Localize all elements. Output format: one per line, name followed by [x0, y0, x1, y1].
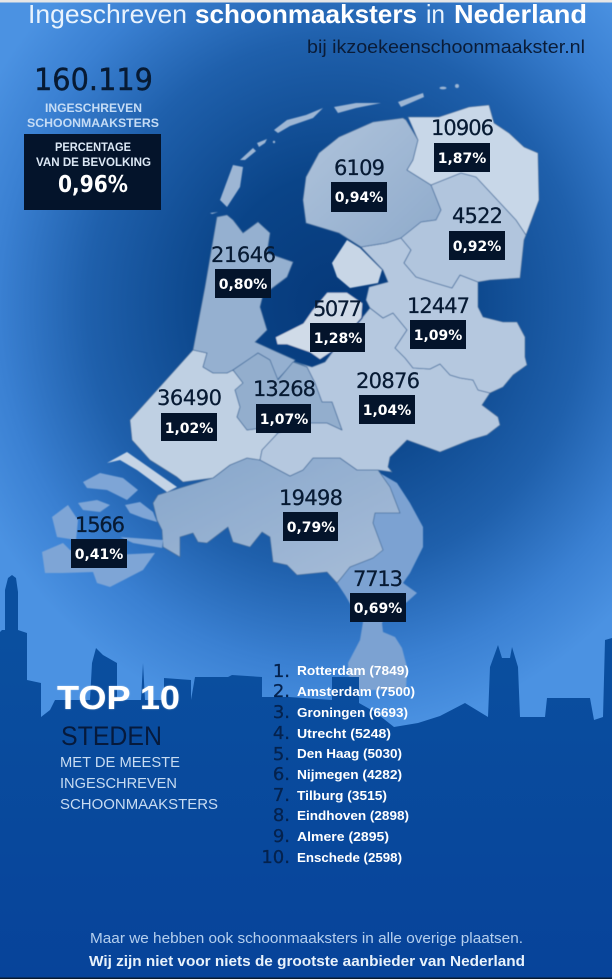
label: Gelderland: [356, 369, 420, 424]
label: Friesland: [331, 156, 387, 212]
total caption: INGESCHREVEN: [45, 103, 142, 115]
map: Zeeland islands: [42, 473, 163, 587]
top 10 city list: 5.: [273, 744, 290, 765]
top 10 city list: 7.: [273, 785, 290, 806]
map: Friesland: [303, 118, 441, 247]
label: Overijssel: [407, 294, 470, 349]
label: Utrecht: [253, 377, 316, 433]
label: Noord-Holland: [211, 243, 276, 298]
footer text: [89, 931, 525, 970]
top edge line: [0, 0, 612, 2]
footer text: Maar we hebben ook schoonmaaksters in alle overige plaatsen.: [90, 931, 523, 947]
subtitle: bij ikzoekeenschoonmaakster.nl: [307, 36, 585, 57]
label: Friesland: 0,94%: [335, 190, 383, 206]
top 10 title: TOP 10: [57, 679, 180, 716]
label: Groningen: 1,87%: [438, 151, 486, 167]
label: Noord-Holland: 0,80%: [219, 277, 267, 293]
percentage panel: VAN DE BEVOLKING: [36, 157, 151, 169]
label: Flevoland: 5077: [313, 297, 362, 321]
label: Limburg: 7713: [353, 567, 403, 591]
top 10 city list: Nijmegen (4282): [297, 767, 402, 782]
label: Zuid-Holland: 36490: [157, 386, 222, 410]
label: Noord-Brabant: [279, 486, 343, 541]
top 10 description: SCHOONMAAKSTERS: [60, 796, 218, 813]
label: Drenthe: [449, 204, 505, 260]
map: Limburg: [337, 472, 423, 690]
top 10 city list: 10.: [261, 847, 290, 868]
title: [28, 0, 587, 29]
total caption: [27, 103, 159, 130]
percentage panel: PERCENTAGE: [55, 142, 131, 154]
top 10 description: INGESCHREVEN: [60, 775, 177, 792]
map of the Netherlands: [42, 84, 539, 690]
label: Zuid-Holland: 1,02%: [165, 421, 213, 437]
label: Limburg: [350, 567, 406, 622]
label: Groningen: [431, 116, 494, 172]
map: Overijssel: [361, 238, 527, 393]
top 10 description: [60, 754, 218, 813]
map: Goeree strip: [107, 452, 177, 492]
map: Utrecht: [233, 353, 342, 433]
label: Noord-Brabant: 19498: [279, 486, 343, 510]
label: Groningen: 10906: [431, 116, 494, 140]
top 10 city list: Rotterdam (7849): [297, 663, 409, 678]
label: Drenthe: 4522: [452, 204, 503, 228]
label: Gelderland: 1,04%: [363, 403, 411, 419]
top 10 city list: 3.: [273, 702, 290, 723]
percentage panel: [24, 134, 161, 210]
bottom edge line: [0, 978, 612, 979]
top 10 city list: Enschede (2598): [297, 850, 402, 865]
national total: [24, 63, 161, 210]
top 10 city list: Utrecht (5248): [297, 726, 391, 741]
footer text: Wij zijn niet voor niets de grootste aanbieder van Nederland: [89, 954, 525, 970]
top 10 description: MET DE MEESTE: [60, 754, 180, 771]
label: Utrecht: 1,07%: [260, 412, 308, 428]
top 10 city list: [261, 661, 415, 868]
label: Noord-Brabant: 0,79%: [287, 520, 335, 536]
map: Drenthe: [401, 173, 526, 288]
top 10 city list: Groningen (6693): [297, 705, 408, 720]
top 10 city list: 1.: [273, 661, 290, 682]
top 10 city list: Eindhoven (2898): [297, 808, 409, 823]
label: Flevoland: [310, 297, 365, 352]
label: Overijssel: 1,09%: [414, 328, 462, 344]
label: Noord-Holland: 21646: [211, 243, 276, 267]
percentage panel: 0,96%: [58, 172, 128, 198]
map: Gelderland: [260, 308, 500, 476]
label: Zuid-Holland: [157, 386, 222, 441]
skyline silhouette: [0, 575, 612, 979]
label: Flevoland: 1,28%: [314, 331, 362, 347]
top 10 city list: 2.: [273, 681, 290, 702]
map: Zuid-Holland: [130, 350, 278, 482]
top 10 city list: Amsterdam (7500): [297, 684, 415, 699]
steden heading: STEDEN: [61, 721, 162, 751]
map: Groningen: [407, 105, 539, 235]
top 10 city list: 6.: [273, 764, 290, 785]
label: Limburg: 0,69%: [354, 601, 402, 617]
label: Zeeland: 1566: [75, 513, 125, 537]
top 10 city list: Den Haag (5030): [297, 746, 402, 761]
label: Zeeland: [71, 513, 127, 568]
label: Zeeland: 0,41%: [75, 547, 123, 563]
map: Noord-Brabant: [153, 458, 400, 583]
label: Overijssel: 12447: [407, 294, 470, 318]
map: Wadden islands: [210, 84, 459, 214]
top 10 heading: [57, 679, 218, 813]
top 10 city list: 4.: [273, 723, 290, 744]
map: Flevoland south: [275, 292, 363, 360]
label: Drenthe: 0,92%: [453, 239, 501, 255]
label: Friesland: 6109: [334, 156, 385, 180]
label: Utrecht: 13268: [253, 377, 316, 401]
top 10 city list: 9.: [273, 826, 290, 847]
total number: 160.119: [34, 63, 153, 98]
top 10 city list: Almere (2895): [297, 829, 389, 844]
top 10 city list: Tilburg (3515): [297, 788, 387, 803]
map: Noord-Holland: [193, 215, 295, 380]
map: Noordoostpolder: [332, 240, 382, 288]
label: Gelderland: 20876: [356, 369, 420, 393]
top 10 city list: 8.: [273, 805, 290, 826]
total caption: SCHOONMAAKSTERS: [27, 118, 159, 130]
